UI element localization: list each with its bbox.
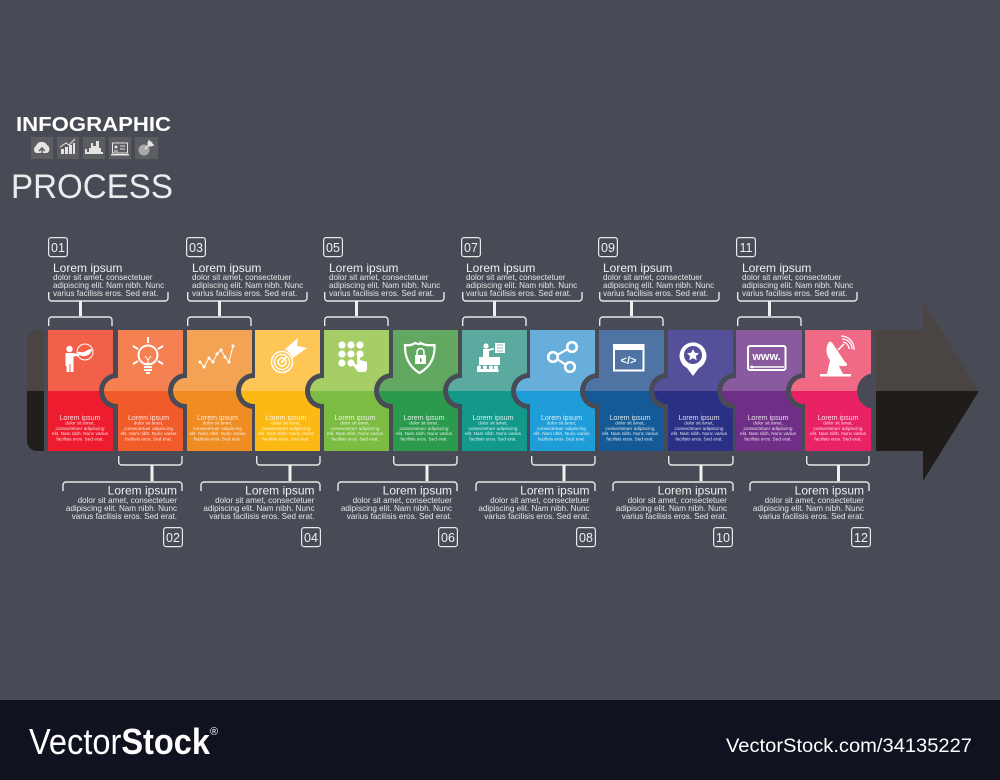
callout 08: varius facilisis eros. Sed erat. <box>484 512 590 521</box>
icon: share nodes <box>548 342 577 372</box>
card text: dolor sit amet, <box>409 420 439 426</box>
card text <box>52 414 109 442</box>
card text: consectetuer adipiscing <box>744 426 793 431</box>
card text: consectetuer adipiscing <box>814 426 863 431</box>
card text: dolor sit amet, <box>134 420 163 426</box>
card text: elit. Nam nibh. Nunc varius <box>396 431 453 436</box>
callout 11: adipiscing elit. Nam nibh. Nunc <box>742 281 853 290</box>
callout 11: varius facilisis eros. Sed erat. <box>742 289 847 298</box>
callout 03: dolor sit amet, consectetuer <box>192 273 292 282</box>
callout 12: dolor sit amet, consectetuer <box>765 496 864 505</box>
card text: elit. Nam nibh. Nunc varius <box>327 431 384 436</box>
card text: Lorem ipsum <box>197 414 238 422</box>
callout 05: 05 <box>326 241 340 255</box>
callout 09 <box>599 238 719 326</box>
card text: consectetuer adipiscing <box>606 426 655 431</box>
callout 10 <box>613 456 733 547</box>
card text: consectetuer adipiscing <box>56 426 105 431</box>
callout 10: Lorem ipsum <box>658 484 727 498</box>
card text: Lorem ipsum <box>609 414 651 422</box>
card text: dolor sit amet, <box>615 420 645 426</box>
card text <box>740 414 797 442</box>
card text: consectetuer adipiscing <box>674 426 724 431</box>
callout 01: varius facilisis eros. Sed erat. <box>53 289 158 298</box>
card text: elit. Nam nibh. Nunc varius <box>740 431 797 436</box>
left tail of arrow <box>27 330 44 451</box>
icon: line chart <box>198 344 234 368</box>
card text <box>327 414 384 442</box>
footer logo: VectorStock <box>29 721 211 762</box>
card text: consectetuer adipiscing <box>262 426 311 431</box>
callout 06 <box>338 456 457 547</box>
callout 06: varius facilisis eros. Sed erat. <box>347 512 452 521</box>
step 03 card <box>168 330 252 451</box>
icon: target and arrow <box>272 338 307 372</box>
callout 07: varius facilisis eros. Sed erat. <box>466 289 571 298</box>
callout 04: varius facilisis eros. Sed erat. <box>209 512 314 521</box>
card text: Lorem ipsum <box>59 414 101 422</box>
card text: dolor sit amet, <box>684 420 714 426</box>
callout 07 <box>462 238 582 326</box>
card text: dolor sit amet, <box>203 420 232 426</box>
icon: keypad and hand <box>338 341 367 372</box>
card text: dolor sit amet, <box>478 420 508 426</box>
step 07 card <box>443 330 527 451</box>
card text: facilisis eros. Sed erat. <box>744 436 792 442</box>
callout 07: adipiscing elit. Nam nibh. Nunc <box>466 281 577 290</box>
card text: facilisis eros. Sed erat. <box>606 436 654 442</box>
card text <box>671 414 728 442</box>
callout 07: dolor sit amet, consectetuer <box>466 273 566 282</box>
callout 05: varius facilisis eros. Sed erat. <box>329 289 434 298</box>
card text: facilisis eros. Sed erat. <box>675 436 723 442</box>
callout 09: varius facilisis eros. Sed erat. <box>603 289 708 298</box>
callout 09: dolor sit amet, consectetuer <box>603 273 703 282</box>
callout 02: Lorem ipsum <box>108 484 177 498</box>
card text: consectetuer adipiscing <box>193 426 242 431</box>
callout 09: 09 <box>601 241 615 255</box>
card text: consectetuer adipiscing <box>124 426 173 431</box>
arrow head <box>876 301 979 481</box>
card text <box>258 414 315 442</box>
card text: consectetuer adipiscing <box>537 426 586 431</box>
icon: browser code window: </> <box>621 355 636 367</box>
callout 04: dolor sit amet, consectetuer <box>215 496 315 505</box>
step 12 card <box>786 330 893 451</box>
callout 04 <box>201 456 320 547</box>
card text <box>533 414 590 442</box>
card text: facilisis eros. Sed erat. <box>469 436 517 442</box>
card text: facilisis eros. Sed erat. <box>814 436 862 442</box>
card text: elit. Nam nibh. Nunc varius <box>533 431 590 436</box>
callout 04: Lorem ipsum <box>245 484 315 498</box>
callout 01 <box>49 238 168 326</box>
card text: elit. Nam nibh. Nunc varius <box>189 431 246 436</box>
card text <box>120 414 177 442</box>
card text: dolor sit amet, <box>340 420 370 426</box>
card text: facilisis eros. Sed erat. <box>194 436 241 442</box>
callout 01: Lorem ipsum <box>53 261 122 275</box>
footer bar <box>0 700 1000 780</box>
card text: Lorem ipsum <box>817 414 859 422</box>
card text <box>810 414 867 442</box>
step 02 card <box>99 330 183 451</box>
callout 11: 11 <box>740 241 753 255</box>
callout 01: dolor sit amet, consectetuer <box>53 273 153 282</box>
icon: www screen: www. <box>751 351 781 363</box>
card text: Lorem ipsum <box>541 414 582 422</box>
card text: Lorem ipsum <box>128 414 169 422</box>
callout 11 <box>737 238 857 326</box>
callout 08: adipiscing elit. Nam nibh. Nunc <box>478 504 590 513</box>
step 05 card <box>305 330 389 451</box>
callout 10: adipiscing elit. Nam nibh. Nunc <box>616 504 727 513</box>
callout 08: Lorem ipsum <box>520 484 590 498</box>
step 06 card <box>374 330 458 451</box>
callout 08: 08 <box>579 531 593 545</box>
card text <box>189 414 246 442</box>
card text: facilisis eros. Sed erat. <box>331 436 379 442</box>
card text: facilisis eros. Sed erat. <box>400 436 448 442</box>
callout 02: 02 <box>166 531 180 545</box>
registered mark: ® <box>210 726 218 738</box>
callout 08 <box>476 456 595 547</box>
card text: Lorem ipsum <box>678 414 720 422</box>
card text: elit. Nam nibh. Nunc varius <box>671 431 728 436</box>
callout 03: Lorem ipsum <box>192 261 261 275</box>
callout 04: adipiscing elit. Nam nibh. Nunc <box>203 504 314 513</box>
callout 02 <box>63 456 182 547</box>
card text: dolor sit amet, <box>753 420 783 426</box>
card text: facilisis eros. Sed erat. <box>125 436 172 442</box>
step 11 card <box>717 330 802 451</box>
callout 12: adipiscing elit. Nam nibh. Nunc <box>753 504 864 513</box>
callout 03 <box>187 238 307 326</box>
title: infographic process <box>11 113 173 206</box>
callout 12: Lorem ipsum <box>795 484 864 498</box>
callout 11: dolor sit amet, consectetuer <box>742 273 842 282</box>
callout 12: varius facilisis eros. Sed erat. <box>759 512 864 521</box>
card text <box>465 414 522 442</box>
heading: INFOGRAPHIC: INFOGRAPHIC <box>16 113 171 136</box>
callout 05: adipiscing elit. Nam nibh. Nunc <box>329 281 440 290</box>
step 01 card <box>48 330 113 451</box>
callout 01: adipiscing elit. Nam nibh. Nunc <box>53 281 164 290</box>
heading: PROCESS: PROCESS <box>11 168 173 206</box>
card text: elit. Nam nibh. Nunc varius <box>602 431 659 436</box>
step 04 card <box>236 330 320 451</box>
callout 09: Lorem ipsum <box>603 261 672 275</box>
callout 05 <box>324 238 444 326</box>
callout 01: 01 <box>51 241 65 255</box>
card text: dolor sit amet, <box>65 420 95 426</box>
icon row: header icons <box>31 137 158 159</box>
callout 07: 07 <box>464 241 478 255</box>
icon: presenter at desk <box>477 343 505 372</box>
callout 05: dolor sit amet, consectetuer <box>329 273 429 282</box>
card text <box>396 414 453 442</box>
card text: facilisis eros. Sed erat. <box>262 436 310 442</box>
callout 12: 12 <box>854 531 868 545</box>
callout 03: 03 <box>189 241 203 255</box>
card text: facilisis eros. Sed erat. <box>56 436 104 442</box>
callout 03: varius facilisis eros. Sed erat. <box>192 289 297 298</box>
card text: Lorem ipsum <box>265 414 307 422</box>
card text: consectetuer adipiscing <box>468 426 518 431</box>
card text <box>602 414 659 442</box>
callout 03: adipiscing elit. Nam nibh. Nunc <box>192 281 303 290</box>
icon: location pin with star <box>680 342 706 376</box>
card text: Lorem ipsum <box>472 414 514 422</box>
callout 06: adipiscing elit. Nam nibh. Nunc <box>341 504 452 513</box>
callout 02: adipiscing elit. Nam nibh. Nunc <box>66 504 177 513</box>
card text: dolor sit amet, <box>271 420 301 426</box>
step 08 card <box>511 330 595 451</box>
callout 06: Lorem ipsum <box>383 484 452 498</box>
callout 06: 06 <box>441 531 455 545</box>
step 09 card <box>580 330 664 451</box>
card text: elit. Nam nibh. Nunc varius <box>810 431 867 436</box>
callout 10: dolor sit amet, consectetuer <box>628 496 727 505</box>
step 10 card <box>649 330 733 451</box>
icon: satellite dish <box>820 336 854 376</box>
card text: Lorem ipsum <box>747 414 789 422</box>
callout 05: Lorem ipsum <box>329 261 398 275</box>
callout 06: dolor sit amet, consectetuer <box>353 496 452 505</box>
callout 09: adipiscing elit. Nam nibh. Nunc <box>603 281 714 290</box>
callout 07: Lorem ipsum <box>466 261 535 275</box>
callout 11: Lorem ipsum <box>742 261 811 275</box>
card text: dolor sit amet, <box>823 420 853 426</box>
card text: elit. Nam nibh. Nunc varius <box>52 431 109 436</box>
callout 02: dolor sit amet, consectetuer <box>78 496 177 505</box>
card text: elit. Nam nibh. Nunc varius <box>465 431 522 436</box>
callout 04: 04 <box>304 531 318 545</box>
callout 10: 10 <box>716 531 730 545</box>
footer id: VectorStock.com/34135227 <box>726 736 972 757</box>
icon: shield with lock <box>405 343 435 373</box>
callout 02: varius facilisis eros. Sed erat. <box>72 512 177 521</box>
card text: Lorem ipsum <box>334 414 376 422</box>
card text: dolor sit amet, <box>547 420 576 426</box>
card text: elit. Nam nibh. Nunc varius <box>258 431 315 436</box>
callout 10: varius facilisis eros. Sed erat. <box>622 512 727 521</box>
card text: Lorem ipsum <box>403 414 445 422</box>
card text: facilisis eros. Sed erat. <box>538 436 585 442</box>
icon: light bulb <box>133 337 163 373</box>
callout 08: dolor sit amet, consectetuer <box>490 496 590 505</box>
card text: consectetuer adipiscing <box>330 426 380 431</box>
callout 12 <box>750 456 870 547</box>
card text: elit. Nam nibh. Nunc varius <box>120 431 177 436</box>
icon: presenter with globe <box>66 344 93 372</box>
card text: consectetuer adipiscing <box>400 426 449 431</box>
